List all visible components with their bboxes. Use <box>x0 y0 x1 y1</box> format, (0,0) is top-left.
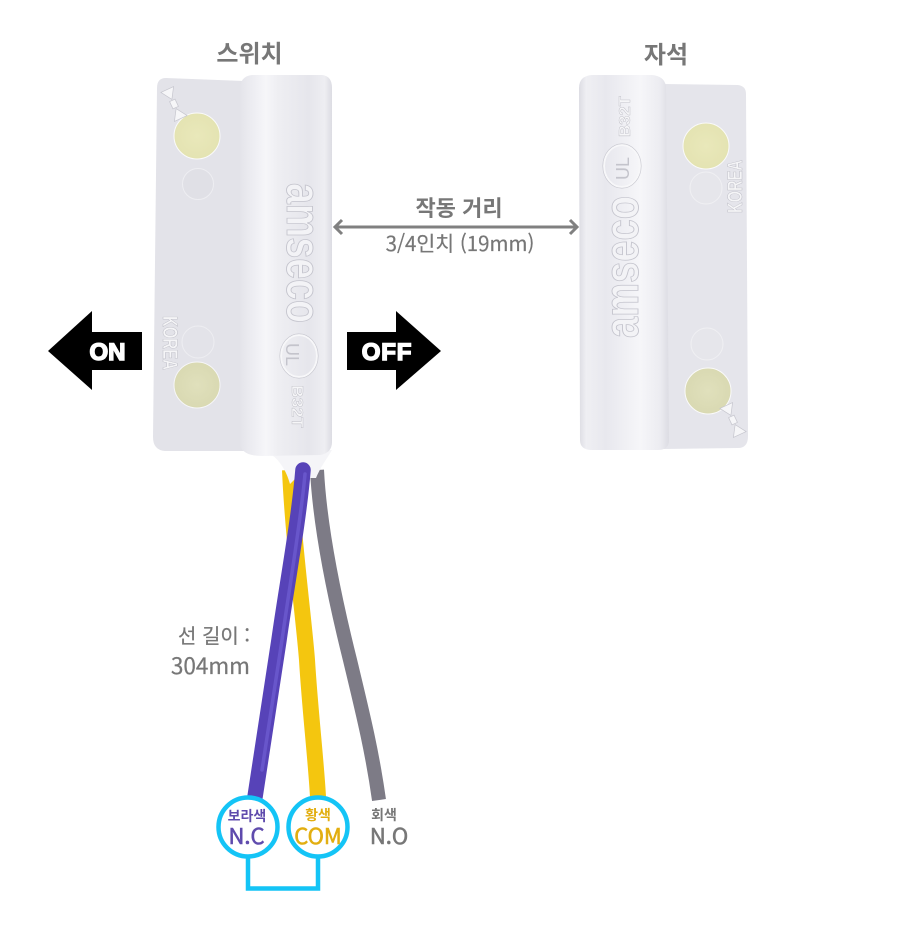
terminal: N.C: 보라색 <box>228 806 266 826</box>
embossed model: B32T <box>288 385 305 428</box>
embossed amseco: amseco <box>276 183 329 323</box>
label: wire length <box>171 620 250 681</box>
embossed KOREA: KOREA <box>724 160 747 213</box>
switch lower hole <box>174 362 220 408</box>
switch body <box>153 75 332 456</box>
embossed KOREA: KOREA <box>158 316 181 370</box>
terminal: N.C: N.C <box>228 819 265 851</box>
wire: purple <box>255 470 305 797</box>
title: switch: 스위치 <box>216 34 283 69</box>
switch upper ghost circle <box>182 168 214 200</box>
switch upper hole <box>174 113 220 159</box>
wire: yellow <box>290 470 318 797</box>
magnet lower ghost circle <box>691 328 723 360</box>
label: distance value: 3/4인치 (19mm) <box>386 227 534 257</box>
embossed mark <box>161 87 187 121</box>
arrow: operating distance <box>335 220 577 234</box>
embossed UL <box>280 334 318 378</box>
embossed UL: UL <box>613 157 633 180</box>
magnet mounting plate <box>664 84 748 449</box>
terminal: N.C <box>218 798 278 856</box>
arrow: OFF <box>347 311 441 390</box>
label: operating distance: 작동 거리 <box>415 191 503 223</box>
terminal: N.O: N.O <box>370 819 408 851</box>
terminal: COM: COM <box>294 819 342 851</box>
terminal: N.O <box>370 805 408 851</box>
wires <box>290 470 379 800</box>
switch neck <box>268 450 332 484</box>
magnet lower hole <box>685 368 731 414</box>
switch lower ghost circle <box>182 326 214 358</box>
terminal: N.O: 회색 <box>371 805 397 825</box>
terminal: COM: 황색 <box>305 805 331 825</box>
arrow: ON: ON <box>90 339 126 366</box>
switch cylinder <box>240 75 332 456</box>
connector between N.C and COM <box>248 858 318 888</box>
label: wire length: 304mm <box>171 649 250 681</box>
wire: gray <box>317 470 379 800</box>
terminal: COM <box>288 798 348 856</box>
embossed UL <box>603 144 641 188</box>
switch mounting plate <box>153 78 244 451</box>
embossed mark <box>720 403 746 437</box>
title: magnet: 자석 <box>644 35 688 70</box>
embossed model: B32T <box>617 96 634 137</box>
embossed amseco: amseco <box>596 196 649 338</box>
magnet cylinder <box>579 75 669 450</box>
arrow: ON <box>48 311 142 390</box>
embossed UL: UL <box>282 343 302 366</box>
arrow: OFF: OFF <box>362 339 412 366</box>
magnet upper ghost circle <box>690 172 722 204</box>
magnet body <box>579 75 748 450</box>
label: wire length: 선 길이 : <box>178 620 250 649</box>
magnet upper hole <box>683 123 729 169</box>
